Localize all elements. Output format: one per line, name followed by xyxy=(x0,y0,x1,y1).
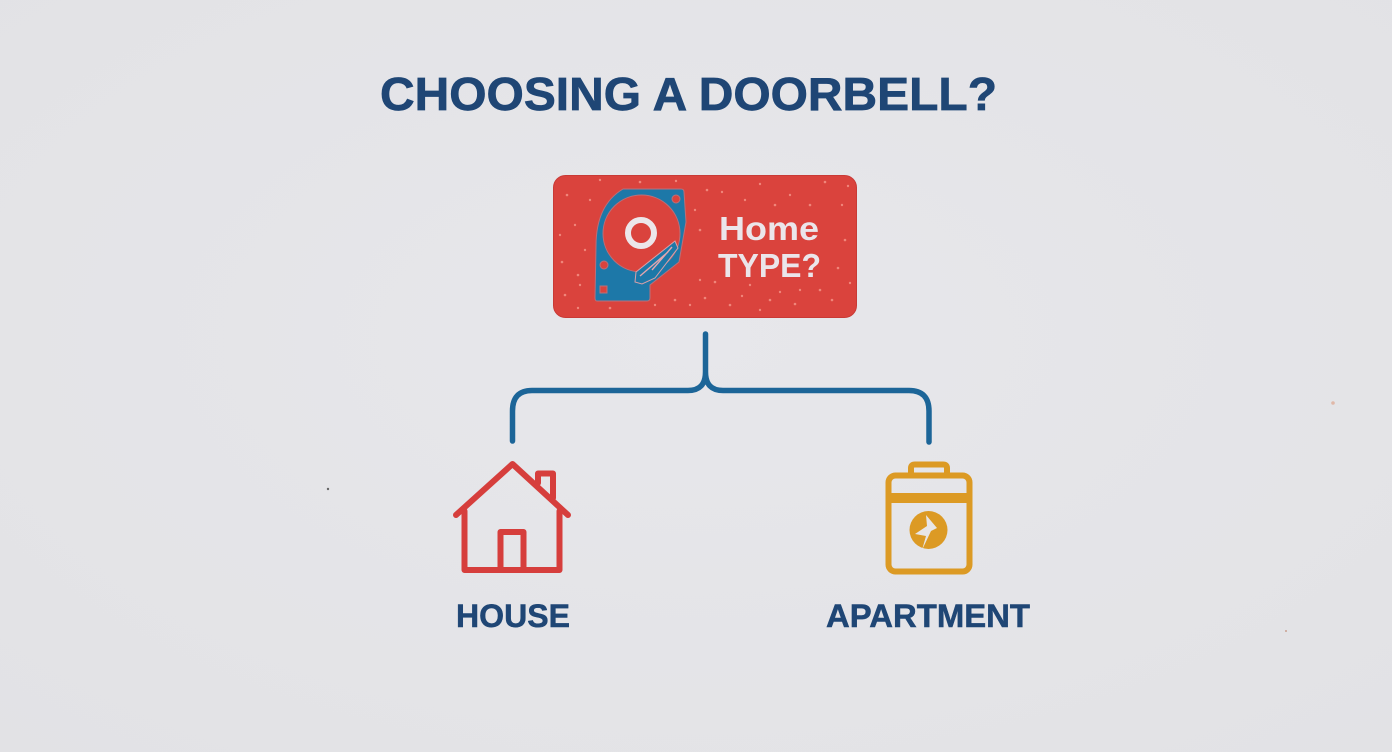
speckle texture xyxy=(559,179,851,311)
icon: apartment clipboard xyxy=(888,464,970,572)
connector: branching lines xyxy=(512,334,929,442)
panel: home type question xyxy=(554,176,856,318)
label: apartment: APARTMENT xyxy=(826,598,1030,634)
label: house: HOUSE xyxy=(456,598,570,634)
icon: house xyxy=(456,464,568,570)
icon: hard drive xyxy=(595,189,686,301)
panel text xyxy=(718,210,821,284)
panel text: TYPE? xyxy=(718,247,821,284)
title: CHOOSING A DOORBELL? xyxy=(380,68,997,120)
panel text: Home xyxy=(719,210,819,247)
